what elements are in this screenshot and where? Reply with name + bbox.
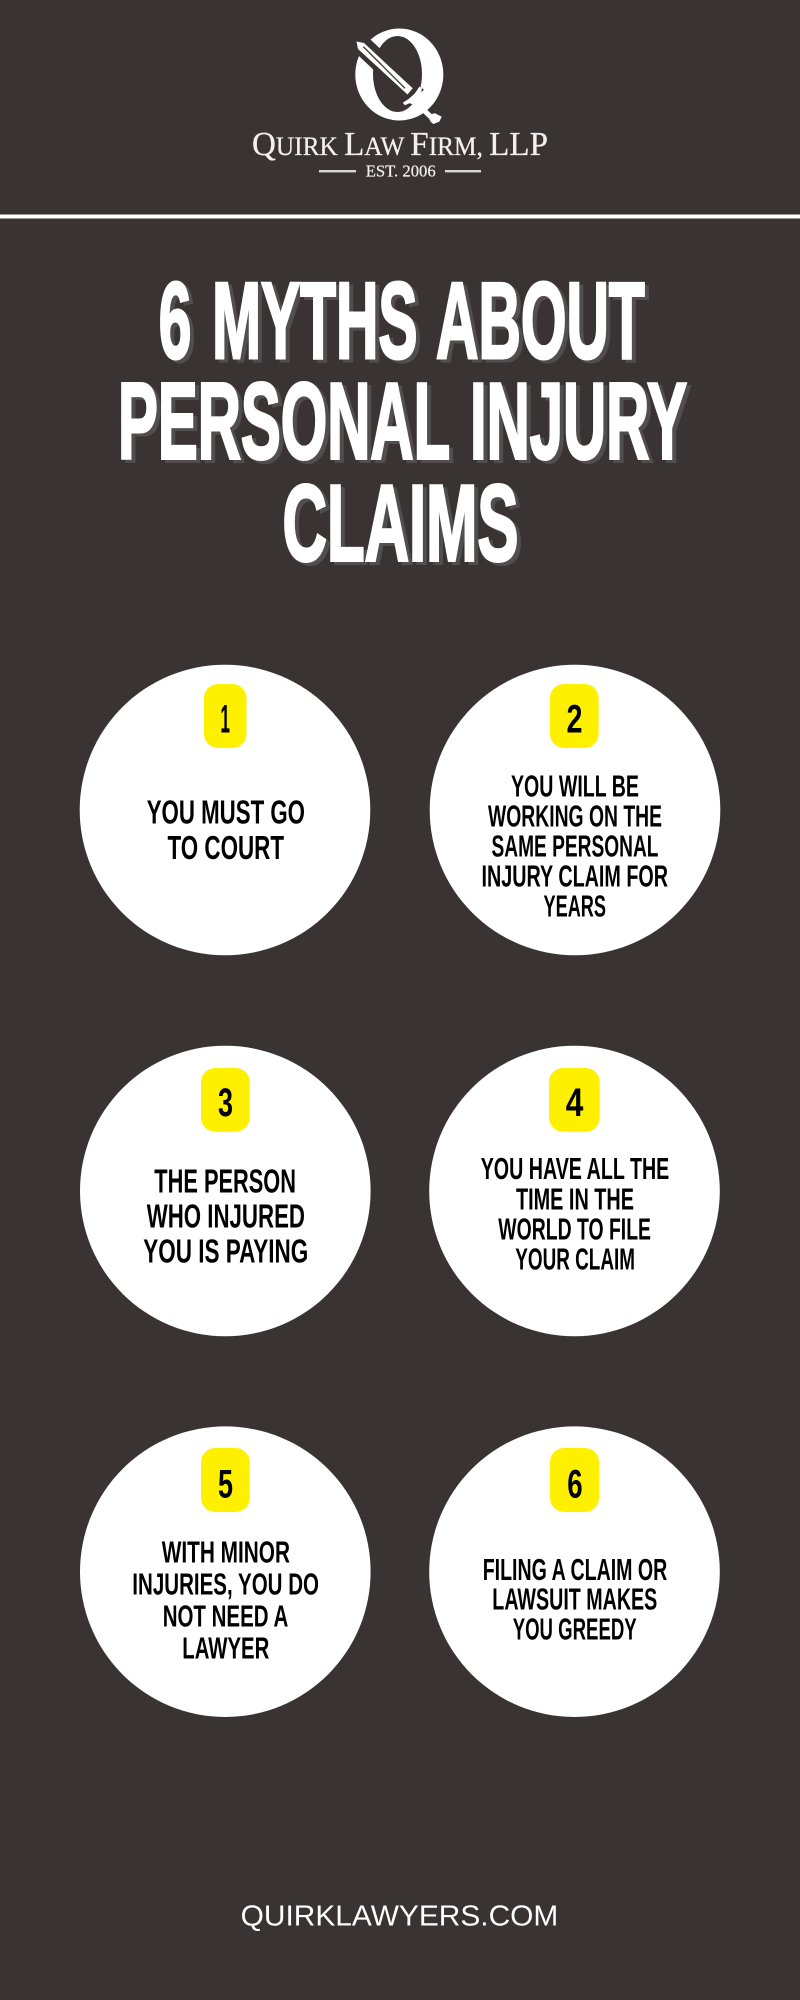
badge: number 3	[201, 1068, 250, 1132]
badge: number 4	[549, 1068, 600, 1132]
text: myth 4: WORLD TO FILE	[498, 1212, 651, 1246]
text: myth 4: YOU HAVE ALL THE	[481, 1152, 669, 1186]
text: myth 3: THE PERSON	[154, 1164, 296, 1201]
panel: myth 5	[80, 1426, 371, 1717]
text: myth 5: WITH MINOR	[162, 1536, 290, 1570]
text: myth 4: TIME IN THE	[516, 1182, 634, 1216]
badge: number 5: 5	[218, 1462, 233, 1506]
badge: number 2	[550, 684, 599, 748]
text: myth 6: FILING A CLAIM OR	[483, 1553, 667, 1587]
text: myth 4	[481, 1152, 669, 1276]
badge: number 4: 4	[566, 1081, 584, 1125]
badge: number 1: 1	[220, 697, 230, 741]
text: myth 5: NOT NEED A	[163, 1600, 288, 1634]
text: myth 4: YOUR CLAIM	[515, 1242, 635, 1276]
logo established line: EST. 2006	[366, 162, 436, 181]
text: myth 3	[143, 1164, 308, 1270]
text: myth 2: YEARS	[544, 890, 606, 924]
text: myth 2: INJURY CLAIM FOR	[482, 860, 668, 894]
text: myth 6: LAWSUIT MAKES	[492, 1582, 657, 1616]
title: CLAIMS	[282, 462, 518, 584]
title	[118, 260, 687, 584]
text: myth 2	[482, 770, 668, 924]
badge: number 1	[204, 684, 246, 748]
panel: myth 2	[430, 665, 720, 955]
text: myth 3: YOU IS PAYING	[143, 1233, 308, 1270]
badge: number 2: 2	[566, 697, 582, 741]
text: myth 2: YOU WILL BE	[511, 770, 639, 804]
text: myth 3: WHO INJURED	[147, 1198, 305, 1235]
panel: myth 4	[429, 1046, 720, 1336]
badge: number 6: 6	[567, 1462, 583, 1506]
badge: number 5	[201, 1448, 250, 1512]
text: myth 5	[132, 1536, 319, 1665]
panel: myth 3	[80, 1046, 371, 1336]
logo wordmark: QUIRK LAW FIRM, LLP	[252, 126, 548, 163]
icon: Q with sword	[349, 28, 443, 124]
text: myth 6: YOU GREEDY	[513, 1612, 637, 1646]
logo: Quirk Law Firm	[252, 28, 548, 181]
badge: number 6	[550, 1448, 599, 1512]
text: myth 5: INJURIES, YOU DO	[132, 1567, 319, 1601]
badge: number 3: 3	[218, 1081, 233, 1125]
panel: myth 1	[80, 665, 370, 955]
text: myth 2: SAME PERSONAL	[492, 830, 658, 864]
text: myth 1	[147, 794, 305, 867]
text: myth 1: YOU MUST GO	[147, 794, 305, 832]
text: myth 2: WORKING ON THE	[488, 800, 662, 834]
footer: website: QUIRKLAWYERS.COM	[241, 1900, 558, 1932]
text: myth 6	[483, 1553, 667, 1646]
text: myth 1: TO COURT	[168, 830, 284, 867]
text: myth 5: LAWYER	[182, 1631, 269, 1665]
panel: myth 6	[429, 1426, 720, 1717]
